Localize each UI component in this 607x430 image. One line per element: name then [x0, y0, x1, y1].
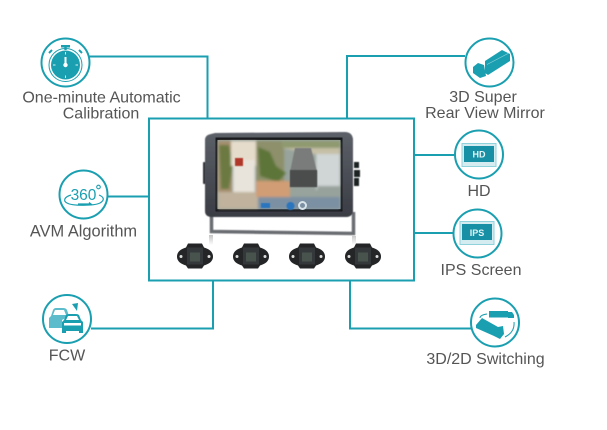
2D truck [489, 311, 508, 318]
front car [62, 314, 83, 333]
label: One-minute Automatic Calibration: Calibration [63, 106, 139, 122]
camera 1 [177, 244, 213, 268]
camera 2 [233, 244, 269, 268]
icon: forward collision warning cars [43, 295, 91, 343]
rear car [49, 308, 69, 328]
mount bracket [212, 212, 354, 234]
label: 3D Super Rear View Mirror: 3D Super [449, 89, 517, 106]
impact spark [72, 303, 78, 311]
icon: HD screen [455, 130, 503, 178]
camera 3 [289, 244, 325, 268]
icon: IPS screen [454, 210, 502, 258]
switching arrows [480, 314, 514, 337]
icon: 360 degree: 360 [71, 187, 97, 204]
icon: IPS screen: IPS [470, 228, 484, 238]
label: 3D/2D Switching: 3D/2D Switching [426, 351, 545, 368]
connector lines [89, 56, 471, 328]
label: AVM Algorithm: AVM Algorithm [30, 222, 137, 240]
cab [473, 63, 486, 78]
label: One-minute Automatic Calibration: One-minute Automatic [22, 90, 181, 106]
label: HD: HD [467, 183, 491, 200]
bracket reflection [209, 235, 356, 245]
label: IPS Screen: IPS Screen [441, 262, 521, 279]
central product panel [149, 118, 414, 280]
camera 4 [345, 244, 381, 268]
monitor [203, 132, 360, 245]
trailer [485, 50, 510, 75]
label: 3D Super Rear View Mirror: Rear View Mirror [425, 105, 546, 122]
screen buttons [261, 203, 270, 208]
camera view screen [218, 140, 340, 210]
icon: stopwatch [42, 38, 90, 86]
icon: 3D/2D switching trucks [471, 298, 519, 346]
label: FCW: FCW [49, 348, 86, 364]
icon: 360 degree [60, 170, 108, 218]
icon: HD screen: HD [472, 150, 486, 160]
monitor body [205, 132, 353, 217]
side knobs [203, 162, 360, 186]
truck model [290, 148, 317, 187]
3D truck [476, 318, 504, 339]
icon: 3D truck [466, 38, 514, 86]
